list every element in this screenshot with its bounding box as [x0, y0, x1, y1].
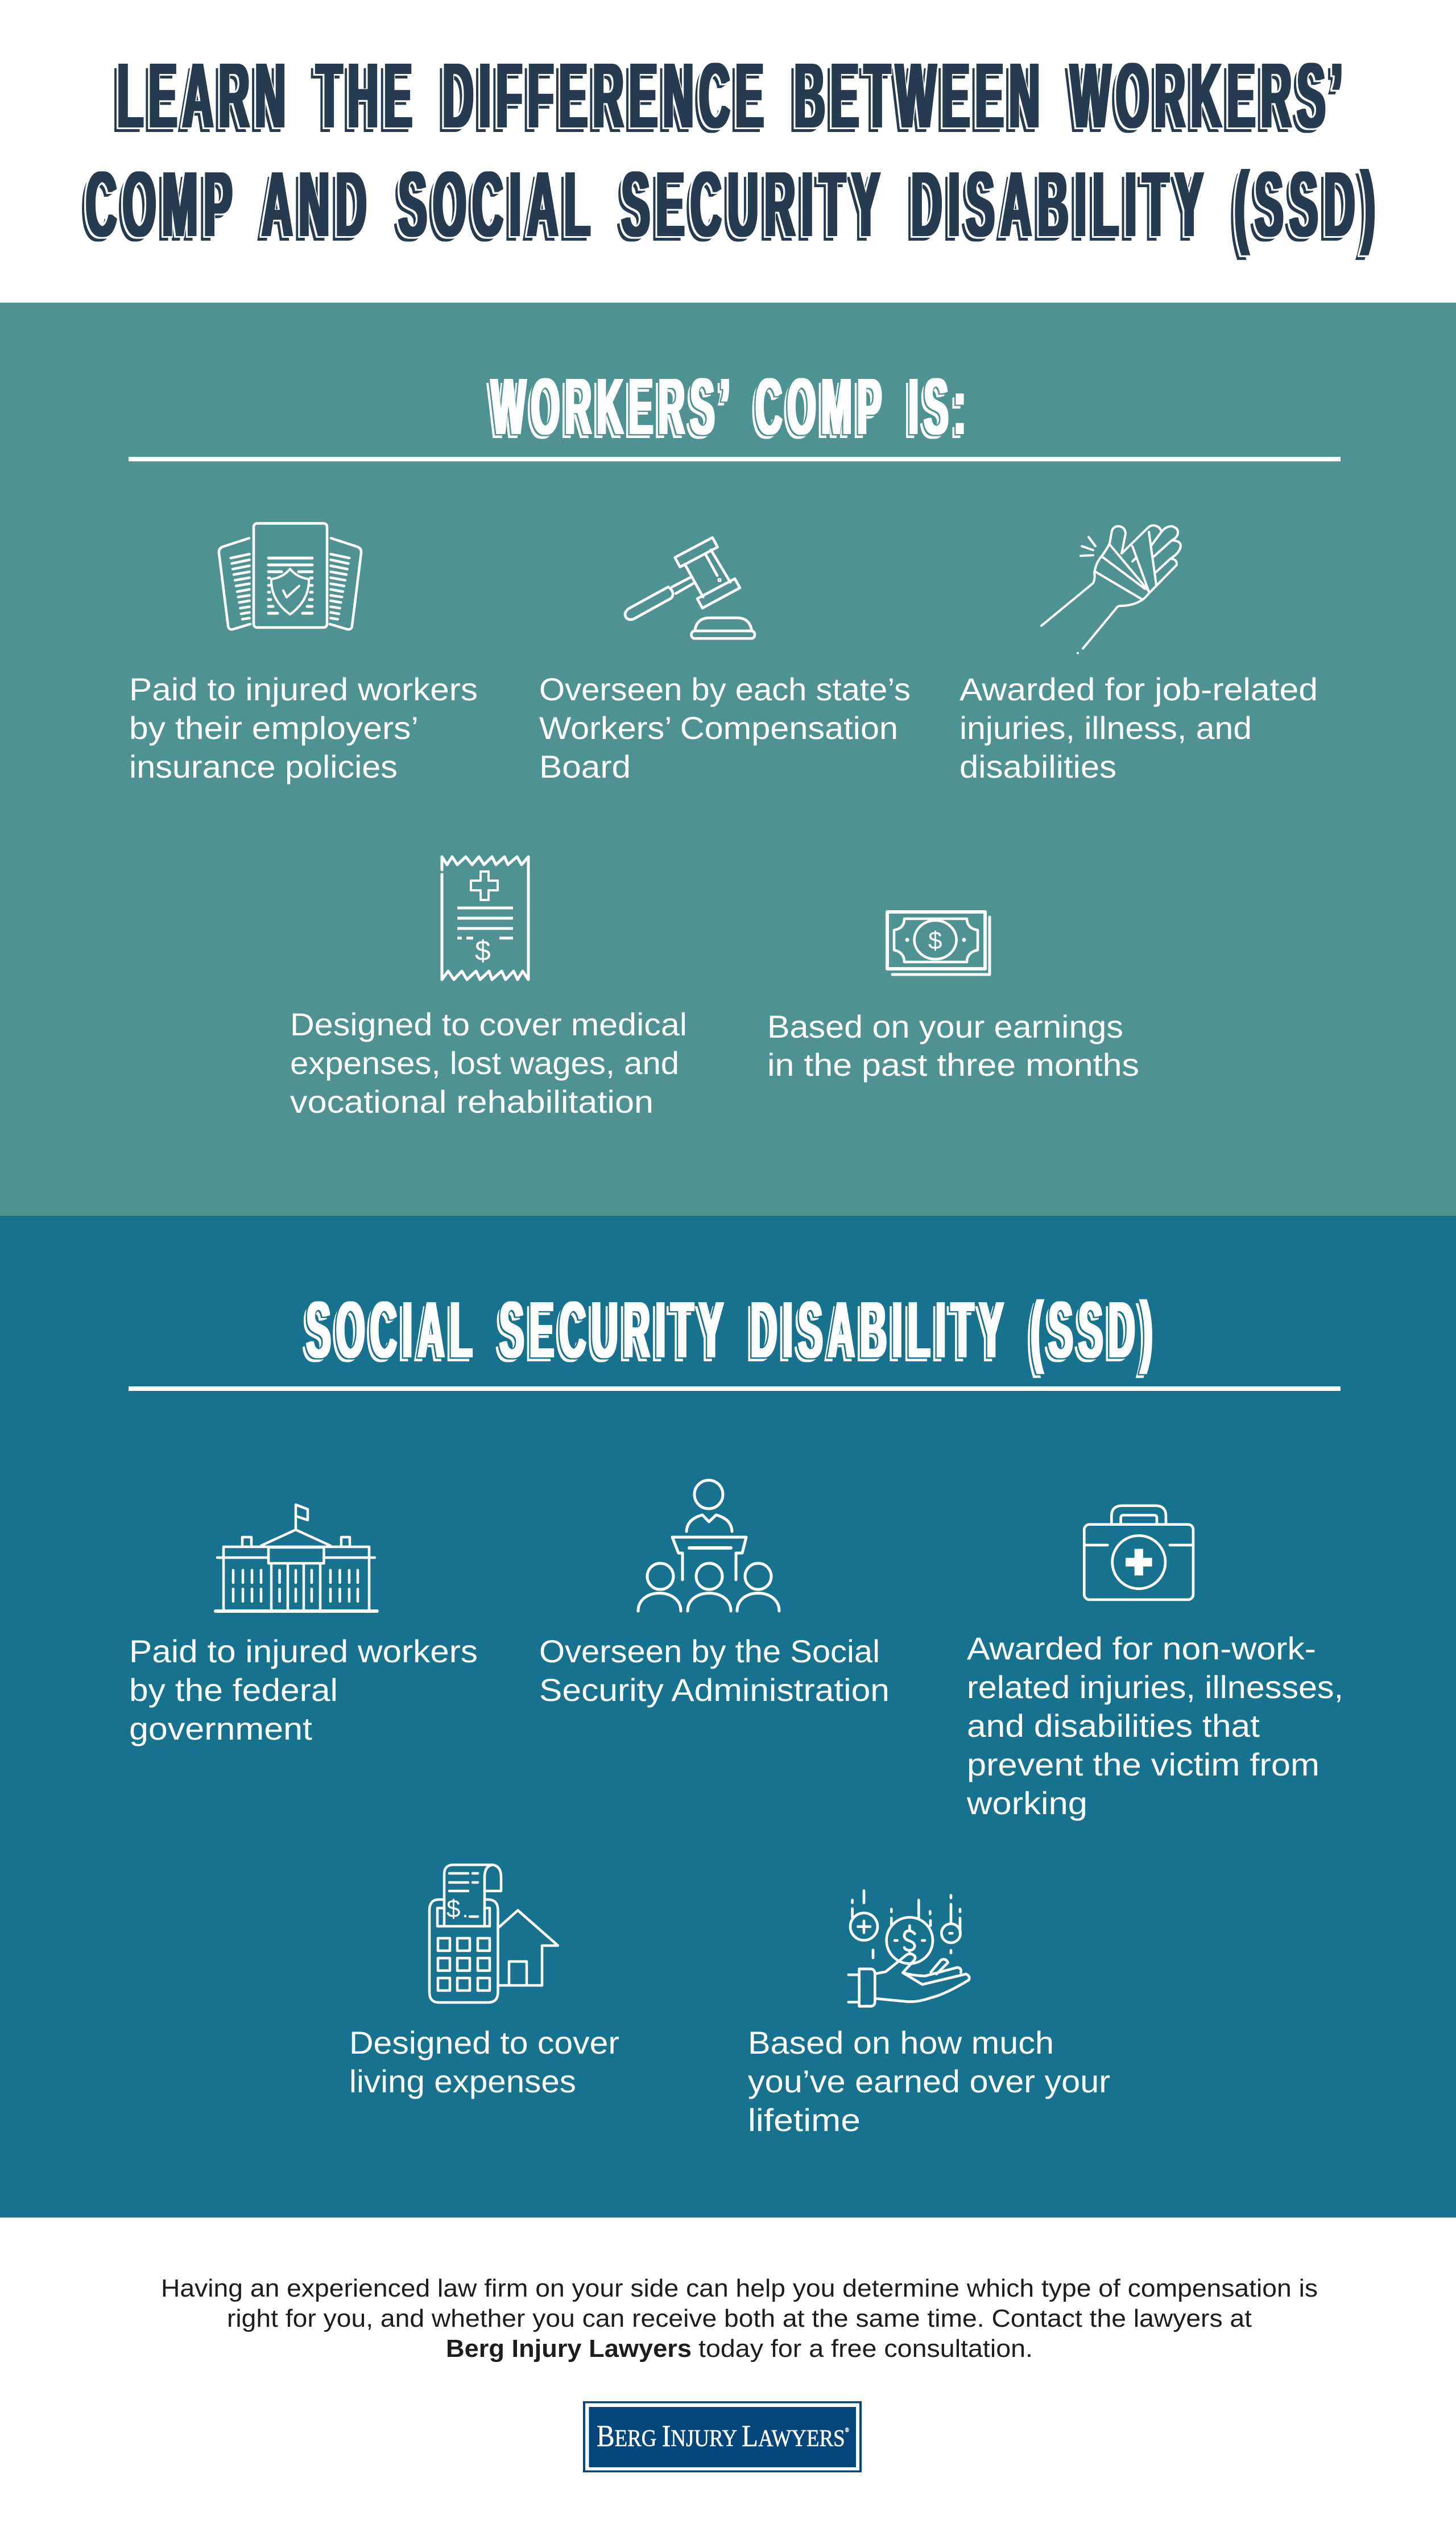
- text: overseen by each state's board: Overseen by each state’s: [539, 671, 911, 707]
- text: overseen by social security administration: Overseen by the Social: [539, 1633, 880, 1669]
- text: awarded for non-work-related injuries: [966, 1630, 1343, 1821]
- text: designed to cover medical expenses: vocational rehabilitation: [290, 1084, 653, 1120]
- text: paid by the federal government: [129, 1633, 478, 1746]
- text: awarded for job-related injuries: Awarded for job-related: [959, 671, 1318, 707]
- logo: Berg Injury Lawyers: [583, 2401, 862, 2472]
- item: designed to cover living expenses: [349, 1865, 619, 2099]
- icon: gavel: [625, 538, 755, 638]
- panel: workers' comp: [0, 303, 1456, 1216]
- text: paid by the federal government: government: [129, 1711, 312, 1746]
- title: [86, 43, 1375, 256]
- text: based on earnings: Based on your earnings: [767, 1009, 1123, 1044]
- item: awarded for job-related injuries: [959, 526, 1318, 784]
- logo: Berg Injury Lawyers: ®: [845, 2427, 849, 2434]
- text: based on lifetime earnings: lifetime: [748, 2102, 861, 2138]
- text: paid to injured workers: [129, 671, 478, 784]
- footer text: Having an experienced law firm on your side can help you determine which type of compensation is: [161, 2274, 1318, 2302]
- item: paid to injured workers by employers: [129, 523, 478, 784]
- icon: calculator, receipt and house: $: [446, 1895, 460, 1923]
- logo: Berg Injury Lawyers: BERG INJURY LAWYERS: [597, 2419, 857, 2453]
- text: designed to cover living expenses: [349, 2025, 619, 2099]
- text: awarded for non-work-related injuries: prevent the victim from: [967, 1746, 1320, 1782]
- icon: banknote stack: $: [928, 927, 942, 955]
- text: awarded for non-work-related injuries: related injuries, illnesses,: [967, 1669, 1343, 1705]
- text: overseen by each state's board: Board: [539, 749, 631, 784]
- footer text: [161, 2274, 1318, 2363]
- item: overseen by state board: [539, 538, 911, 784]
- text: overseen by each state's board: Workers’ Compensation: [539, 710, 898, 746]
- item: paid by federal government: [129, 1505, 478, 1746]
- text: designed to cover medical expenses: Designed to cover medical: [290, 1006, 687, 1042]
- panel: social security disability: [0, 1216, 1456, 2218]
- icon: government building: [216, 1505, 377, 1611]
- text: designed to cover medical expenses: [290, 1006, 687, 1120]
- text: overseen by social security administration: Security Administration: [539, 1672, 890, 1708]
- footer text: today for a free consultation.: [698, 2335, 1033, 2363]
- text: overseen by each state's board: [539, 671, 911, 784]
- text: based on earnings: in the past three months: [767, 1047, 1139, 1083]
- icon: hand catching coins: [849, 1890, 969, 2006]
- text: paid to injured workers: insurance policies: [129, 749, 398, 784]
- title: LEARN THE DIFFERENCE BETWEEN WORKERS’: [117, 43, 1343, 147]
- item: based on lifetime earnings: [748, 1890, 1110, 2138]
- icon: calculator, receipt and house: [429, 1865, 558, 2002]
- text: designed to cover living expenses: living expenses: [349, 2063, 576, 2099]
- footer text: Berg Injury Lawyers: [446, 2335, 692, 2363]
- text: paid to injured workers: Paid to injured workers: [129, 671, 478, 707]
- heading: workers' comp is: WORKERS’ COMP IS:: [491, 362, 966, 452]
- text: based on earnings: [767, 1009, 1139, 1083]
- icon: bandaged hand: [1041, 526, 1181, 653]
- icon: banknote stack: [887, 912, 990, 974]
- text: awarded for non-work-related injuries: and disabilities that: [967, 1708, 1260, 1744]
- text: based on lifetime earnings: [748, 2025, 1110, 2138]
- title: COMP AND SOCIAL SECURITY DISABILITY (SSD): [86, 152, 1375, 256]
- item: awarded for non-work-related injuries: [966, 1506, 1343, 1821]
- item: overseen by social security administration: [539, 1480, 890, 1708]
- item: designed to cover medical expenses: [290, 857, 687, 1120]
- icon: medical bill: $: [475, 935, 491, 967]
- footer text: right for you, and whether you can receive both at the same time. Contact the lawyers at: [227, 2305, 1252, 2332]
- icon: insurance documents with shield: [219, 523, 361, 629]
- text: awarded for job-related injuries: injuries, illness, and: [959, 710, 1252, 746]
- item: based on earnings: [767, 912, 1139, 1083]
- text: designed to cover medical expenses: expenses, lost wages, and: [290, 1045, 679, 1081]
- text: paid by the federal government: Paid to injured workers: [129, 1633, 478, 1669]
- text: awarded for job-related injuries: [959, 671, 1318, 784]
- heading: social security disability: SOCIAL SECURITY DISABILITY (SSD): [306, 1286, 1153, 1375]
- icon: first aid kit: [1084, 1506, 1193, 1600]
- text: paid to injured workers: by their employers’: [129, 710, 419, 746]
- text: awarded for non-work-related injuries: working: [966, 1785, 1087, 1821]
- icon: medical bill: [442, 857, 528, 980]
- icon: speaker at podium with audience: [638, 1480, 779, 1611]
- text: designed to cover living expenses: Designed to cover: [349, 2025, 619, 2060]
- text: overseen by social security administration: [539, 1633, 890, 1708]
- text: awarded for job-related injuries: disabilities: [959, 749, 1116, 784]
- text: awarded for non-work-related injuries: Awarded for non-work-: [967, 1630, 1316, 1666]
- text: paid by the federal government: by the federal: [129, 1672, 338, 1708]
- text: based on lifetime earnings: Based on how much: [748, 2025, 1054, 2060]
- text: based on lifetime earnings: you’ve earned over your: [748, 2063, 1110, 2099]
